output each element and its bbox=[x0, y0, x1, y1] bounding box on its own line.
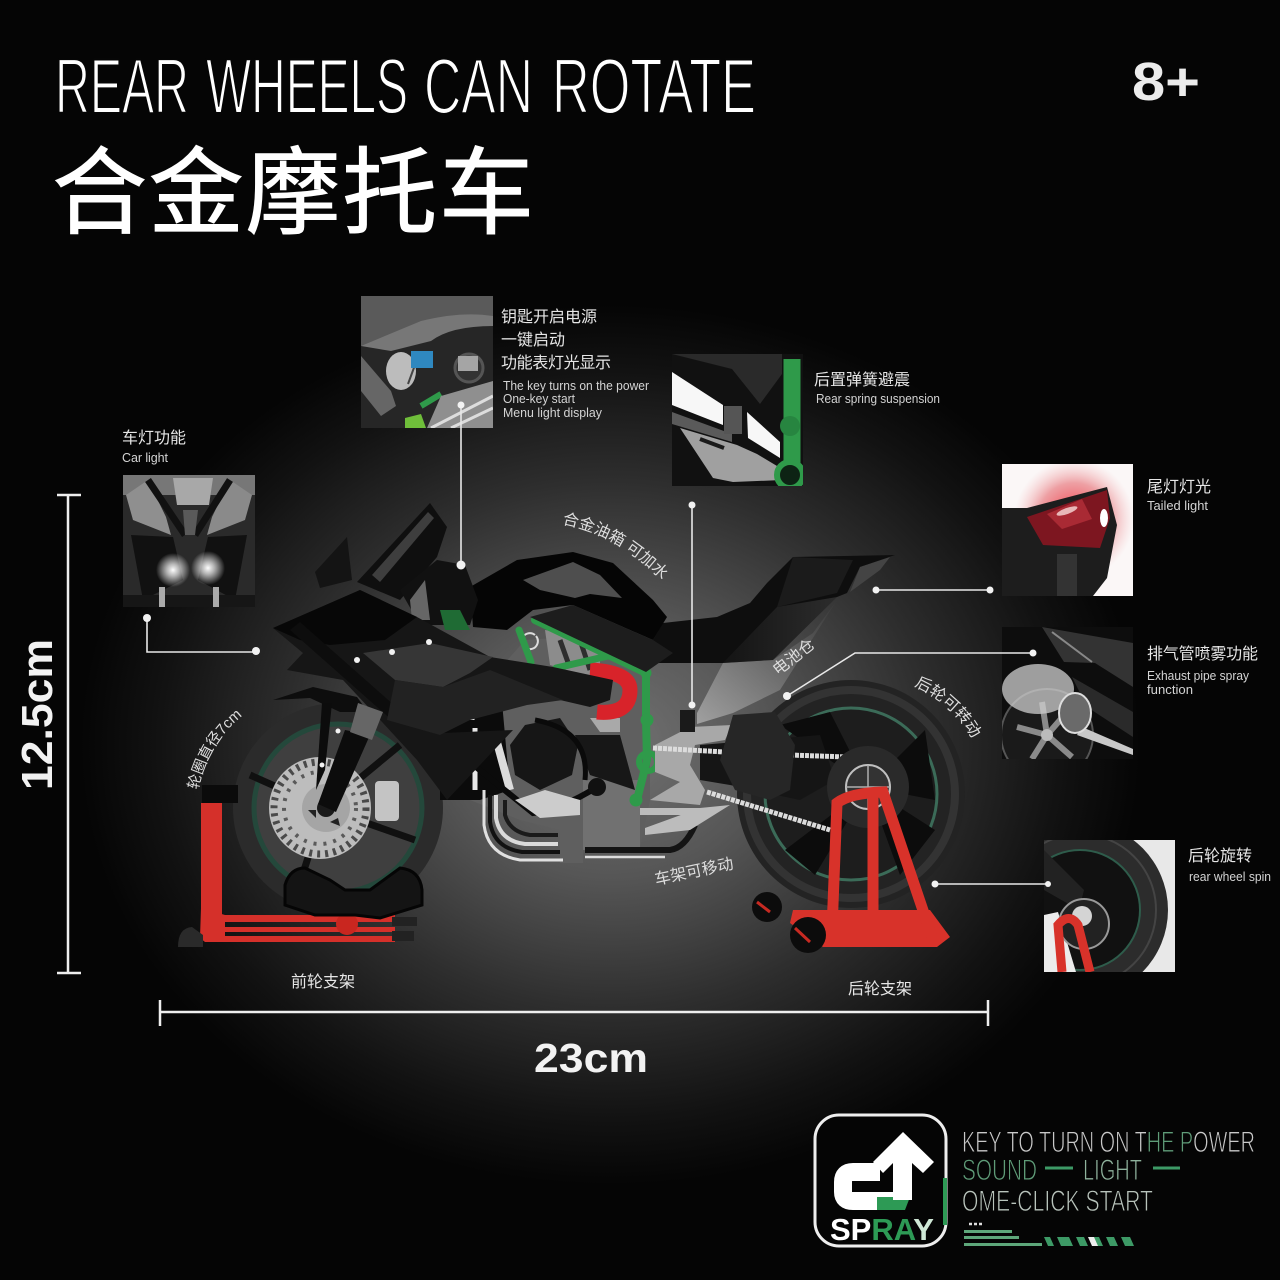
rear wheel bbox=[737, 680, 965, 908]
panel: rear spring bbox=[672, 354, 940, 708]
text: exhaust: Exhaust pipe spray bbox=[1147, 669, 1250, 683]
leader: exhaust bbox=[783, 650, 1036, 700]
heading: car light bbox=[122, 429, 186, 465]
brake caliper bbox=[375, 781, 399, 821]
title: chinese: 合金摩托车 bbox=[52, 141, 534, 247]
rear shock mount bbox=[680, 710, 695, 732]
leader: dashboard bbox=[456, 402, 466, 570]
windscreen bbox=[357, 503, 447, 600]
photo: rear wheel bbox=[1044, 840, 1175, 972]
decorative status bars bbox=[964, 1224, 1134, 1246]
title: english: REAR bbox=[55, 42, 189, 130]
label: alloy tank: 合金油箱 可加水 bbox=[564, 512, 668, 579]
label: rear stand: 后轮支架 bbox=[848, 980, 912, 998]
leader: tail light bbox=[872, 586, 994, 594]
red ring bbox=[590, 670, 630, 712]
photo: rear spring bbox=[672, 354, 803, 486]
front stand bbox=[178, 785, 417, 947]
panel: tail light bbox=[872, 459, 1211, 596]
panel: exhaust bbox=[783, 627, 1258, 781]
rear stand bbox=[752, 792, 950, 953]
height dimension: 12.5cm bbox=[13, 639, 62, 790]
title: english: CAN bbox=[424, 42, 533, 130]
front fender bbox=[273, 687, 368, 712]
under tank panel bbox=[530, 605, 673, 672]
engine bbox=[440, 630, 650, 863]
feature text: KEY TO TURN ON THE POWER bbox=[962, 1126, 1255, 1159]
body dots bbox=[320, 639, 432, 768]
text: exhaust bbox=[1147, 645, 1258, 697]
text: dashboard: Menu light display bbox=[503, 406, 603, 420]
title: english bbox=[55, 42, 756, 130]
front fork bbox=[316, 703, 383, 812]
age badge: 8+ bbox=[1132, 52, 1200, 112]
label: battery box: 电池仓 bbox=[769, 635, 818, 679]
tail section bbox=[653, 555, 895, 663]
text: exhaust: function bbox=[1147, 683, 1193, 697]
exhaust pipes bbox=[484, 790, 695, 860]
motorcycle bbox=[178, 503, 965, 953]
leader: rear spring bbox=[688, 502, 696, 708]
fuel tank bbox=[470, 552, 667, 640]
width dimension: 23cm bbox=[534, 1035, 648, 1081]
text: dashboard: The key turns on the power bbox=[503, 379, 649, 393]
text: rear wheel: rear wheel spin bbox=[1189, 870, 1271, 884]
text: exhaust: 排气管喷雾功能 bbox=[1147, 645, 1258, 663]
panel: rear wheel spin bbox=[932, 822, 1271, 998]
height dimension bbox=[13, 495, 81, 973]
label: movable frame: 车架可移动 bbox=[653, 855, 735, 889]
text: dashboard bbox=[501, 308, 649, 420]
spray logo bbox=[815, 1115, 946, 1247]
front wheel bbox=[233, 703, 443, 913]
spray logo: SPRAY bbox=[830, 1212, 934, 1247]
tank highlight bbox=[523, 562, 622, 598]
handlebar cockpit bbox=[400, 560, 478, 630]
text: dashboard: 钥匙开启电源 bbox=[501, 308, 597, 326]
chain bbox=[653, 748, 847, 830]
swing arm bbox=[700, 735, 835, 800]
title: english: WHEELS bbox=[206, 42, 408, 130]
label: front stand: 前轮支架 bbox=[291, 973, 355, 991]
text: rear spring bbox=[814, 370, 940, 406]
label: rim diameter: 轮圈直径7cm bbox=[186, 711, 242, 789]
text: dashboard: 一键启动 bbox=[501, 331, 565, 349]
width dimension bbox=[160, 1000, 988, 1081]
title: english: ROTATE bbox=[552, 42, 756, 130]
green frame bbox=[519, 620, 657, 804]
photo: exhaust bbox=[1002, 627, 1133, 759]
text: tail light: 尾灯灯光 bbox=[1147, 478, 1211, 496]
chain guard bbox=[720, 712, 795, 800]
photo: headlights bbox=[123, 475, 255, 607]
rear hub bbox=[827, 746, 909, 828]
heading: car light: Car light bbox=[122, 451, 169, 465]
rear set and footpeg bbox=[640, 725, 732, 835]
photo: tail light bbox=[1002, 464, 1133, 596]
text: rear spring: 后置弹簧避震 bbox=[814, 370, 910, 389]
text: rear spring: Rear spring suspension bbox=[816, 392, 940, 406]
panel: car light bbox=[122, 429, 260, 655]
rear subframe bbox=[697, 600, 837, 724]
feature text: OME-CLICK START bbox=[962, 1185, 1153, 1218]
leader: car light bbox=[143, 614, 260, 655]
photo: dashboard bbox=[361, 296, 493, 428]
front cradle bbox=[285, 868, 422, 918]
text: rear wheel: 后轮旋转 bbox=[1188, 847, 1252, 865]
feature text bbox=[962, 1126, 1255, 1218]
text: tail light bbox=[1147, 478, 1211, 513]
text: dashboard: 功能表灯光显示 bbox=[501, 354, 611, 372]
text: tail light: Tailed light bbox=[1147, 499, 1209, 513]
feature text: LIGHT bbox=[1083, 1154, 1142, 1187]
text: dashboard: One-key start bbox=[503, 392, 575, 406]
leader: rear wheel bbox=[932, 880, 1051, 888]
heading: car light: 车灯功能 bbox=[122, 429, 186, 447]
main fairing bbox=[273, 590, 613, 800]
text: rear wheel bbox=[1188, 847, 1271, 884]
feature text: SOUND bbox=[962, 1154, 1037, 1187]
brake disc bbox=[269, 757, 371, 859]
label: rear wheel rotates: 后轮可转动 bbox=[914, 676, 982, 738]
mirror bbox=[315, 537, 352, 588]
panel: dashboard bbox=[361, 296, 649, 570]
